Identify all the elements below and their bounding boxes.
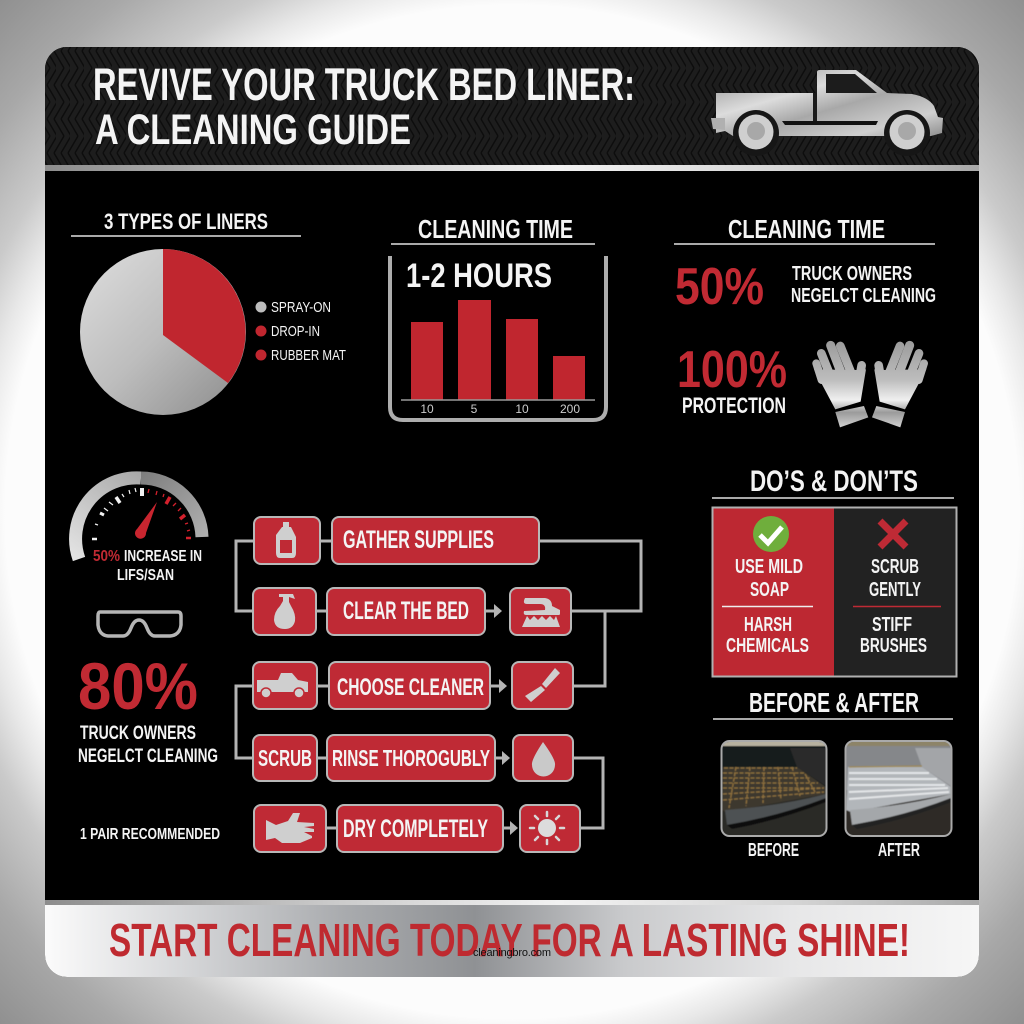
icon: small truck: [257, 673, 308, 692]
don't column: BRUSHES: [860, 635, 927, 657]
photo: dirty liner before: [721, 741, 827, 836]
heading: 3 types of liners: 3 TYPES OF LINERS: [104, 209, 268, 234]
do column: CHEMICALS: [726, 635, 809, 657]
heading: before and after: BEFORE & AFTER: [749, 687, 919, 718]
do column: [713, 508, 834, 676]
flowchart connectors: [236, 541, 641, 828]
step: scrub and rinse: SCRUB: [258, 745, 312, 771]
do column: HARSH: [744, 614, 792, 636]
icon: pickup truck: [711, 70, 943, 156]
panel: cleaning time bar chart: [390, 214, 606, 420]
caption: before: BEFORE: [748, 840, 799, 860]
panel: before and after: [713, 687, 953, 860]
do column: SOAP: [750, 579, 789, 601]
step: choose cleaner: CHOOSE CLEANER: [337, 674, 484, 701]
icon: scrub brush: [522, 598, 560, 627]
icon: water drop: [532, 742, 555, 777]
icon: safety goggles: [98, 612, 181, 636]
don't column: STIFF: [872, 614, 912, 636]
legend: RUBBER MAT: [271, 347, 346, 364]
icon: scraper tool: [525, 668, 560, 702]
panel: do's and don'ts: [712, 465, 956, 676]
title: A CLEANING GUIDE: [95, 106, 411, 154]
step: gather supplies: GATHER SUPPLIES: [343, 526, 494, 554]
icon: gloves: [814, 345, 926, 427]
legend: SPRAY-ON: [271, 299, 331, 316]
step: gather supplies: [254, 517, 539, 564]
gauge caption: LIFS/SAN: [117, 567, 174, 584]
panel: left stats: [76, 478, 220, 843]
note: 1 pair recommended: 1 PAIR RECOMMENDED: [80, 826, 220, 843]
stat label: truck owners neglect: [791, 263, 936, 307]
gauge caption: 50%: [93, 548, 120, 565]
stat label: truck owners neglect: TRUCK OWNERS: [792, 263, 912, 285]
step: scrub and rinse: [253, 735, 573, 781]
bar chart: 200: [560, 402, 580, 416]
big value: 1-2 hours: 1-2 HOURS: [406, 257, 552, 295]
icon: spray bottle: [274, 594, 295, 629]
stat: 100%: 100%: [677, 341, 787, 399]
heading: cleaning time: CLEANING TIME: [418, 214, 573, 244]
step: dry completely: [254, 805, 580, 852]
step: clear the bed: CLEAR THE BED: [343, 597, 469, 625]
watermark: cleaningbro.com: [473, 947, 551, 959]
gauge caption: INCREASE IN: [124, 548, 202, 565]
step: clear the bed: [253, 588, 571, 635]
bar chart: 10: [420, 402, 434, 416]
gauge: [76, 478, 202, 559]
panel: cleaning time stats: [674, 214, 936, 427]
icon: gloved hand: [266, 813, 314, 843]
heading: cleaning time: CLEANING TIME: [728, 214, 885, 244]
bar chart: [401, 300, 595, 416]
don't column: SCRUB: [871, 556, 919, 578]
icon: red cross: [880, 521, 906, 547]
title: REVIVE YOUR TRUCK BED LINER:: [93, 59, 635, 110]
stat label: truck owners neglect: TRUCK OWNERS: [80, 723, 196, 744]
photo: clean liner after: [845, 741, 952, 836]
title: [93, 59, 635, 154]
step: dry completely: DRY COMPLETELY: [343, 815, 488, 843]
do column: USE MILD: [735, 556, 803, 578]
stat: 80%: 80%: [78, 649, 198, 723]
panel: 3 types of liners: [71, 209, 346, 415]
icon: detergent jug: [276, 522, 296, 558]
arrows: [485, 604, 518, 835]
step: scrub and rinse: RINSE THOROGUBLY: [332, 745, 490, 771]
legend: DROP-IN: [271, 323, 320, 340]
don't column: [834, 508, 956, 676]
icon: green check: [753, 516, 789, 552]
caption: after: AFTER: [878, 840, 920, 860]
stat label: truck owners neglect: [78, 723, 218, 767]
stat label: truck owners neglect: NEGELCT CLEANING: [791, 285, 936, 307]
stat label: truck owners neglect: NEGELCT CLEANING: [78, 746, 218, 767]
heading: do's and don'ts: DO’S & DON’TS: [750, 465, 918, 498]
pie chart: [80, 249, 246, 415]
legend: [256, 299, 346, 364]
stat label: protection: PROTECTION: [682, 393, 786, 418]
icon: sun: [530, 812, 564, 844]
gauge caption: [93, 548, 202, 584]
bar chart: 5: [471, 402, 478, 416]
don't column: GENTLY: [869, 579, 921, 601]
step: choose cleaner: [253, 662, 573, 709]
stat: 50%: 50%: [675, 258, 764, 316]
bar chart: 10: [515, 402, 529, 416]
chart frame: [390, 256, 606, 420]
